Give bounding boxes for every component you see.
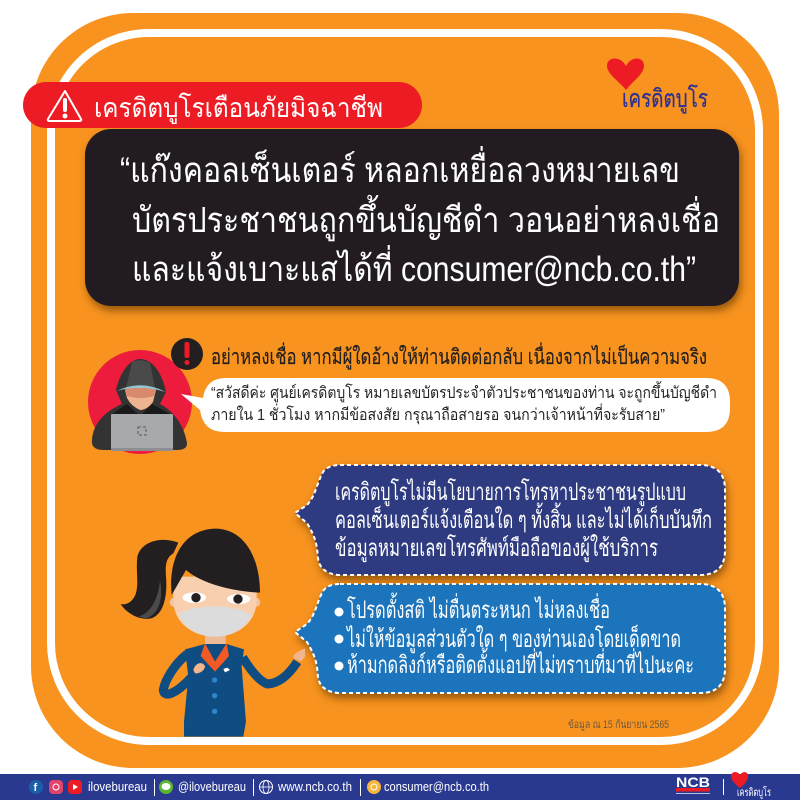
navy policy bubble — [295, 465, 725, 575]
white inner frame — [51, 33, 759, 741]
logo: credit bureau — [607, 58, 708, 114]
headline text: บัตรประชาชนถูกขึ้นบัญชีดำ วอนอย่าหลงเชื่อ — [132, 194, 720, 241]
scam call speech bubble: ภายใน 1 ชั่วโมง หากมีข้อสงสัย กรุณาถือสายรอ จนกว่าเจ้าหน้าที่จะรับสาย” — [211, 403, 665, 425]
footer bar: ilovebureau — [88, 779, 147, 794]
footer bar: www.ncb.co.th — [277, 779, 352, 794]
ears — [170, 598, 179, 607]
NCB logo: NCB — [676, 774, 710, 790]
eyes — [183, 592, 250, 604]
footer bar: consumer@ncb.co.th — [384, 779, 489, 794]
hacker illustration — [88, 350, 192, 454]
face — [173, 577, 257, 637]
scam call speech bubble: “สวัสดีค่ะ ศูนย์เครดิตบูโร หมายเลขบัตรประจำตัวประชาชนของท่าน จะถูกขึ้นบัญชีดำ — [211, 381, 717, 403]
face mask — [178, 606, 252, 637]
ponytail — [121, 540, 178, 619]
scam call speech bubble — [181, 378, 730, 432]
hands — [193, 663, 205, 673]
name badge — [223, 668, 230, 672]
uniform jacket — [184, 644, 246, 737]
blue advice bubble: โปรดตั้งสติ ไม่ตื่นตระหนก ไม่หลงเชื่อ — [347, 592, 610, 624]
blue advice bubble — [295, 584, 725, 693]
red warning label — [23, 82, 422, 128]
masked staff character — [121, 529, 305, 737]
headline text: “แก๊งคอลเซ็นเตอร์ หลอกเหยื่อลวงหมายเลข — [120, 146, 680, 190]
hacker face — [125, 387, 156, 410]
icon: exclamation badge — [171, 338, 203, 370]
small credit bureau logo — [731, 772, 771, 799]
contact icons — [154, 779, 381, 796]
laptop — [111, 414, 173, 451]
dark headline panel — [85, 129, 739, 306]
arms — [243, 657, 297, 684]
footer bar — [0, 772, 800, 800]
navy policy bubble: ข้อมูลหมายเลขโทรศัพท์มือถือของผู้ใช้บริการ — [335, 534, 658, 563]
social icons — [29, 780, 82, 794]
collar — [201, 643, 229, 672]
headline text: และแจ้งเบาะแสได้ที่ consumer@ncb.co.th” — [132, 245, 696, 289]
social icons: f — [34, 782, 38, 794]
neck — [205, 632, 226, 652]
red warning label: เครดิตบูโรเตือนภัยมิจฉาชีพ — [94, 93, 383, 124]
hair — [171, 529, 260, 595]
headline text — [120, 146, 720, 289]
buttons — [212, 677, 217, 714]
icon: warning triangle — [48, 91, 81, 121]
date note: ข้อมูล ณ 15 กันยายน 2565 — [568, 719, 669, 731]
small credit bureau logo: เครดิตบูโร — [737, 785, 771, 799]
footer bar: @ilovebureau — [178, 779, 246, 794]
logo: credit bureau: เครดิตบูโร — [622, 84, 708, 114]
